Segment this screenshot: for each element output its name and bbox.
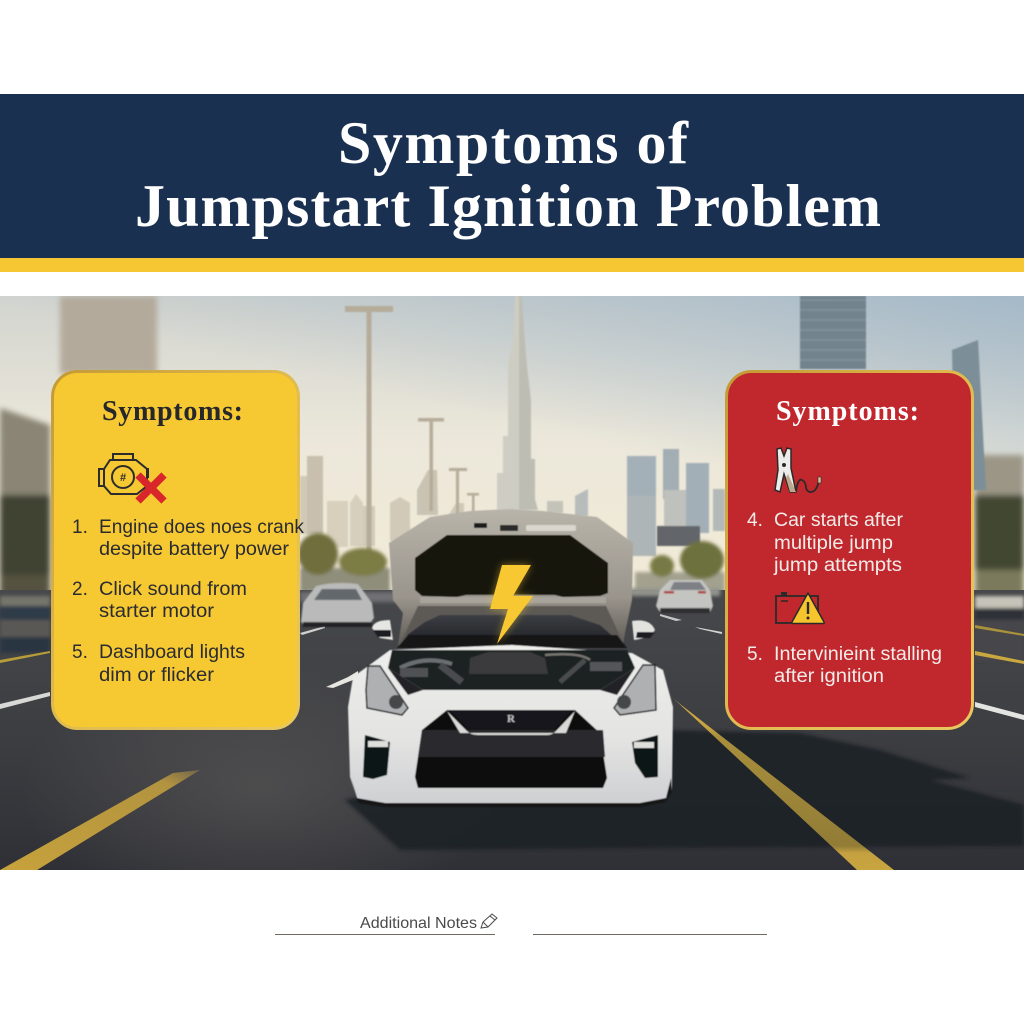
list: left symptoms: despite battery power (99, 539, 290, 560)
icon: engine warning with red cross (99, 454, 164, 501)
list item: car starts: multiple jump (774, 533, 893, 554)
list: left symptoms: starter motor (99, 601, 215, 622)
icon: jumper clamp and cable (775, 448, 821, 492)
open hood (389, 509, 633, 645)
headlights (366, 666, 408, 715)
car with open hood (348, 509, 673, 807)
list item: car starts: 4. (747, 510, 763, 531)
car shadow (345, 730, 1024, 850)
notes label: Additional Notes (360, 915, 477, 932)
splitter (351, 777, 672, 807)
title banner (0, 94, 1024, 272)
car with open hood: R (507, 713, 516, 725)
list item: car starts: jump attempts (773, 555, 902, 576)
title (135, 110, 881, 239)
street lamps (344, 306, 480, 551)
list item: stalling: after ignition (774, 666, 884, 687)
heading: left symptoms: Symptoms: (102, 396, 243, 427)
additional notes (275, 914, 767, 934)
icon: pencil (481, 914, 497, 928)
list item: stalling: Intervinieint stalling (774, 644, 942, 665)
list: left symptoms: 5. (72, 642, 88, 663)
road markings (0, 614, 1024, 870)
list item: stalling (747, 644, 942, 687)
roadside trees (298, 533, 725, 594)
mirrors (372, 620, 393, 640)
list item: stalling: 5. (747, 644, 763, 665)
icon: battery warning (776, 592, 824, 624)
title: Jumpstart Ignition Problem (135, 173, 881, 239)
lightning bolt (490, 565, 533, 644)
panel: left yellow symptoms (52, 372, 304, 728)
title: Symptoms of (338, 110, 689, 176)
fog lights (363, 735, 390, 779)
list: left symptoms: dim or flicker (99, 665, 215, 686)
list: left symptoms: Dashboard lights (99, 642, 245, 663)
list: left symptoms: Engine does noes crank (99, 517, 304, 538)
icon: engine warning with red cross: # (120, 472, 126, 484)
heading: right symptoms: Symptoms: (776, 396, 919, 427)
list: left symptoms (72, 517, 304, 686)
city skyline background (0, 296, 1024, 606)
hero photo: city road with car (0, 296, 1024, 920)
list: left symptoms: 2. (72, 579, 88, 600)
background cars (301, 580, 713, 627)
list item: car starts: Car starts after (774, 510, 904, 531)
note lines (275, 934, 767, 936)
engine bay (388, 650, 635, 695)
front grille (415, 710, 607, 788)
panel: right red symptoms (726, 372, 972, 728)
car body (348, 645, 673, 803)
list: left symptoms: 1. (72, 517, 88, 538)
windshield (408, 614, 612, 636)
list: left symptoms: Click sound from (99, 579, 247, 600)
road surface (0, 586, 1024, 870)
list item: car starts (747, 510, 904, 576)
